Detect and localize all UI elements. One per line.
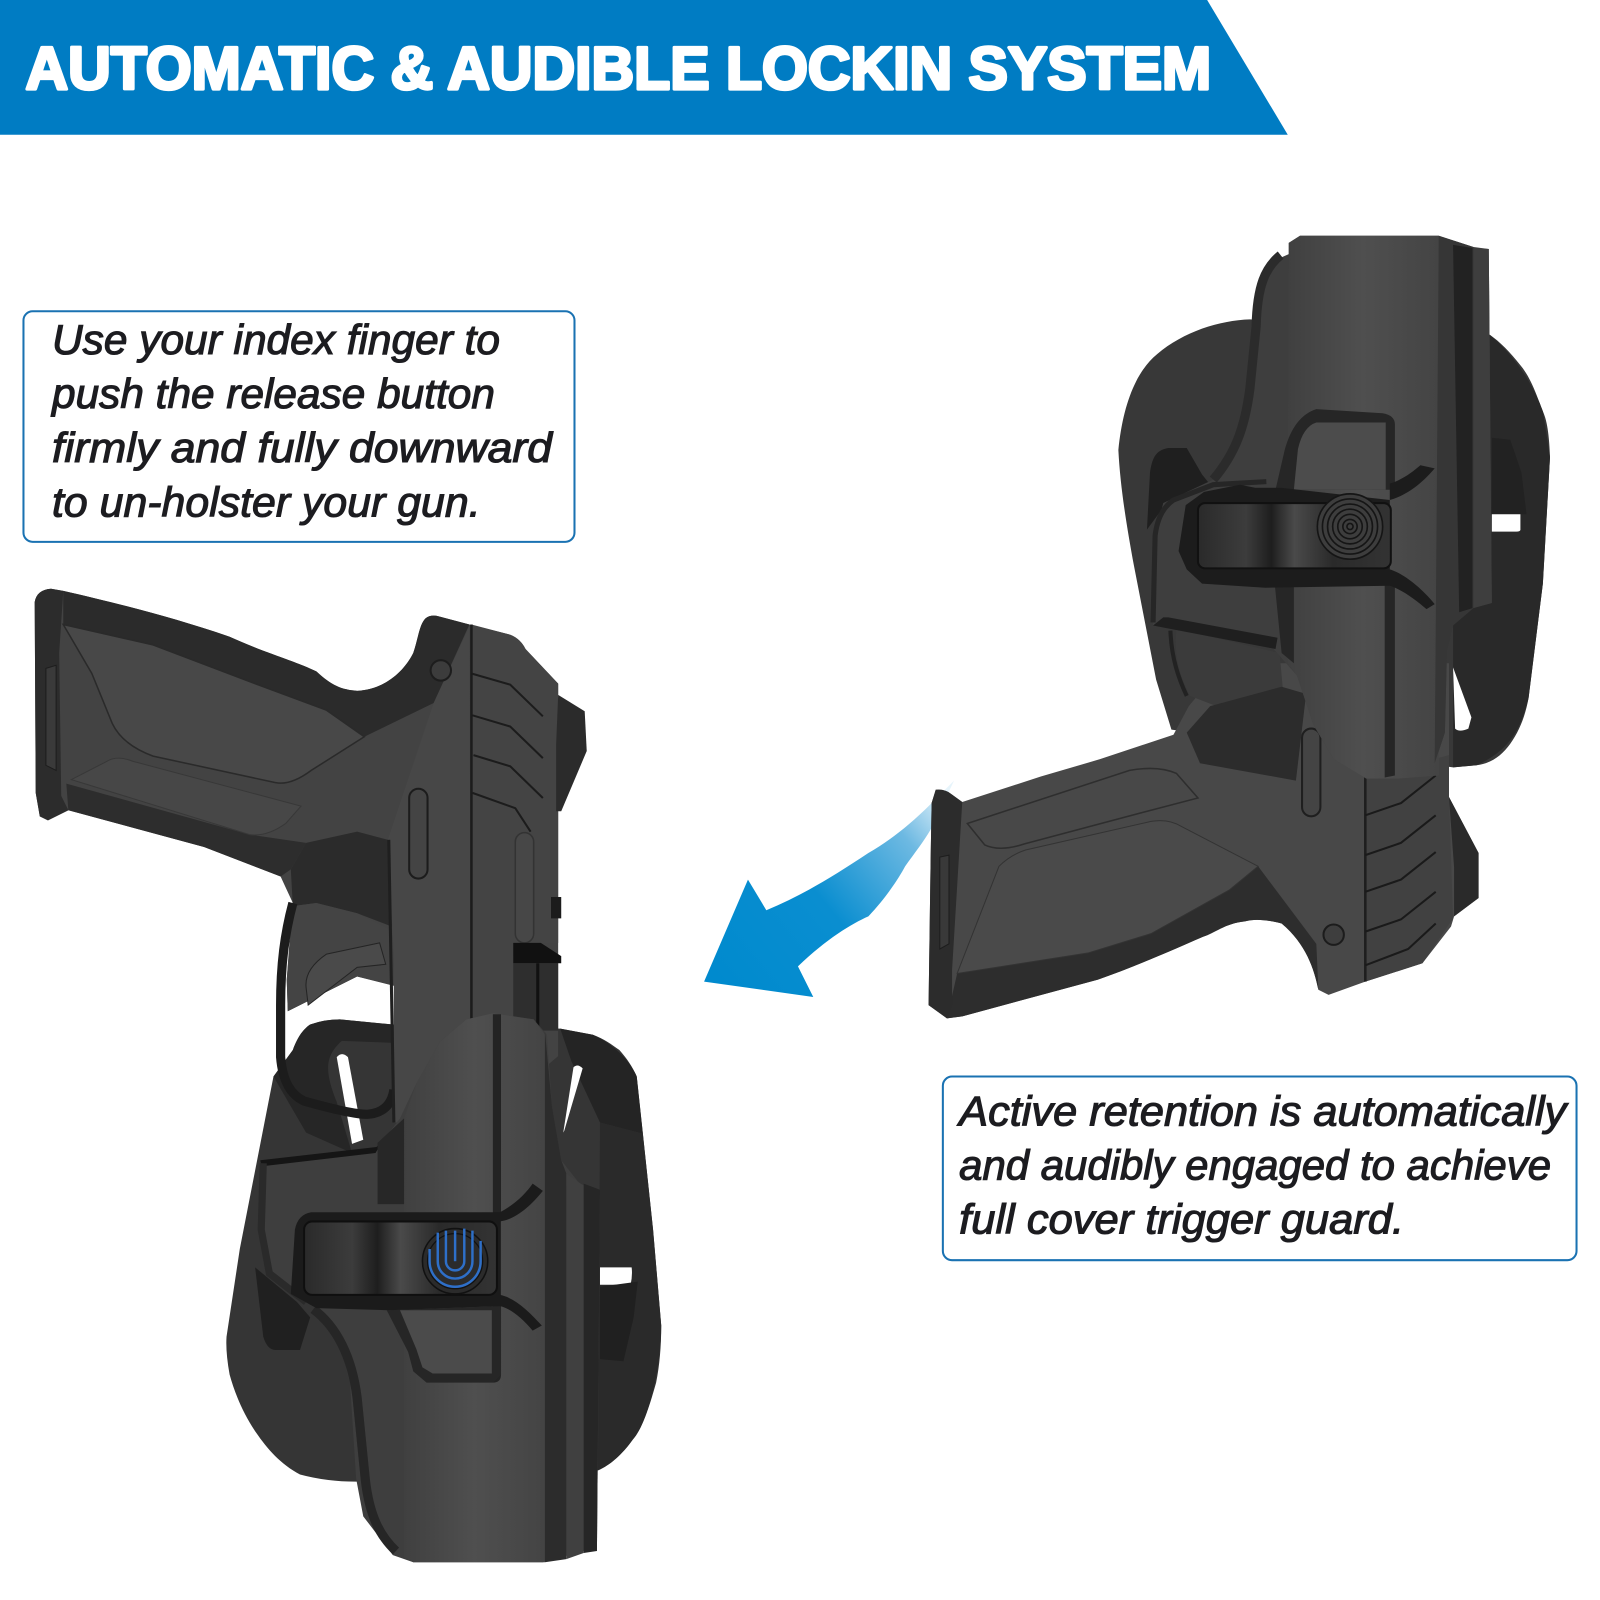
holster shell — [1153, 236, 1492, 779]
paddle lugs — [255, 1267, 310, 1350]
callout: active retention: Active retention is automatically — [956, 1088, 1570, 1135]
release button — [291, 1184, 543, 1331]
trigger — [287, 903, 394, 1011]
rear sight — [1449, 797, 1479, 916]
icon: blue fingerprint — [422, 1229, 488, 1294]
callout: active retention — [943, 1077, 1577, 1260]
grip panels — [957, 821, 1258, 973]
rear sight — [556, 695, 587, 811]
grip upper shadow band — [63, 591, 469, 737]
pistol grip and frame — [929, 663, 1479, 1018]
holster shell — [258, 1013, 600, 1562]
header banner — [0, 0, 1288, 135]
frame front — [388, 627, 471, 1122]
pistol grip and frame — [35, 589, 558, 1122]
slide rear with serrations — [1365, 755, 1453, 982]
grip lower band — [947, 866, 1318, 1018]
paddle openings — [337, 1054, 363, 1144]
holstered pistol (right) — [929, 236, 1550, 1018]
frame pin — [1323, 924, 1344, 945]
grip lower panel — [71, 758, 301, 835]
unholstered pistol with holster (left) — [35, 589, 661, 1562]
paddle openings — [1492, 514, 1520, 532]
trigger guard — [281, 903, 394, 1114]
grip upper panel — [63, 624, 364, 783]
paddle — [1118, 319, 1550, 767]
arrow: draw direction — [704, 781, 954, 997]
callout: release instruction: firmly and fully downward — [52, 424, 554, 471]
slide — [471, 624, 561, 1031]
callout: release instruction: Use your index finger to — [52, 316, 500, 363]
callout: release instruction — [23, 311, 574, 542]
trigger guard shadow — [291, 832, 392, 927]
paddle lugs — [1147, 448, 1214, 530]
grip lower band — [66, 784, 306, 877]
frame slot — [1302, 729, 1320, 816]
callout: active retention: full cover trigger guard. — [959, 1196, 1404, 1243]
callout: release instruction: to un-holster your gun. — [52, 478, 481, 525]
callout: active retention: and audibly engaged to achieve — [959, 1142, 1551, 1189]
release button recess — [1276, 409, 1395, 490]
callout: release instruction: push the release button — [50, 370, 495, 417]
frame pin — [431, 660, 451, 681]
icon: spiral fingerprint — [1317, 494, 1383, 559]
release button — [1179, 465, 1435, 609]
title: AUTOMATIC & AUDIBLE LOCKIN SYSTEM — [26, 35, 1211, 102]
frame slot — [409, 789, 428, 879]
magazine base plate — [35, 589, 68, 820]
magazine base plate — [929, 790, 962, 1018]
paddle — [226, 1019, 661, 1482]
trigger guard shadow — [1187, 687, 1306, 781]
trigger — [1176, 629, 1284, 709]
